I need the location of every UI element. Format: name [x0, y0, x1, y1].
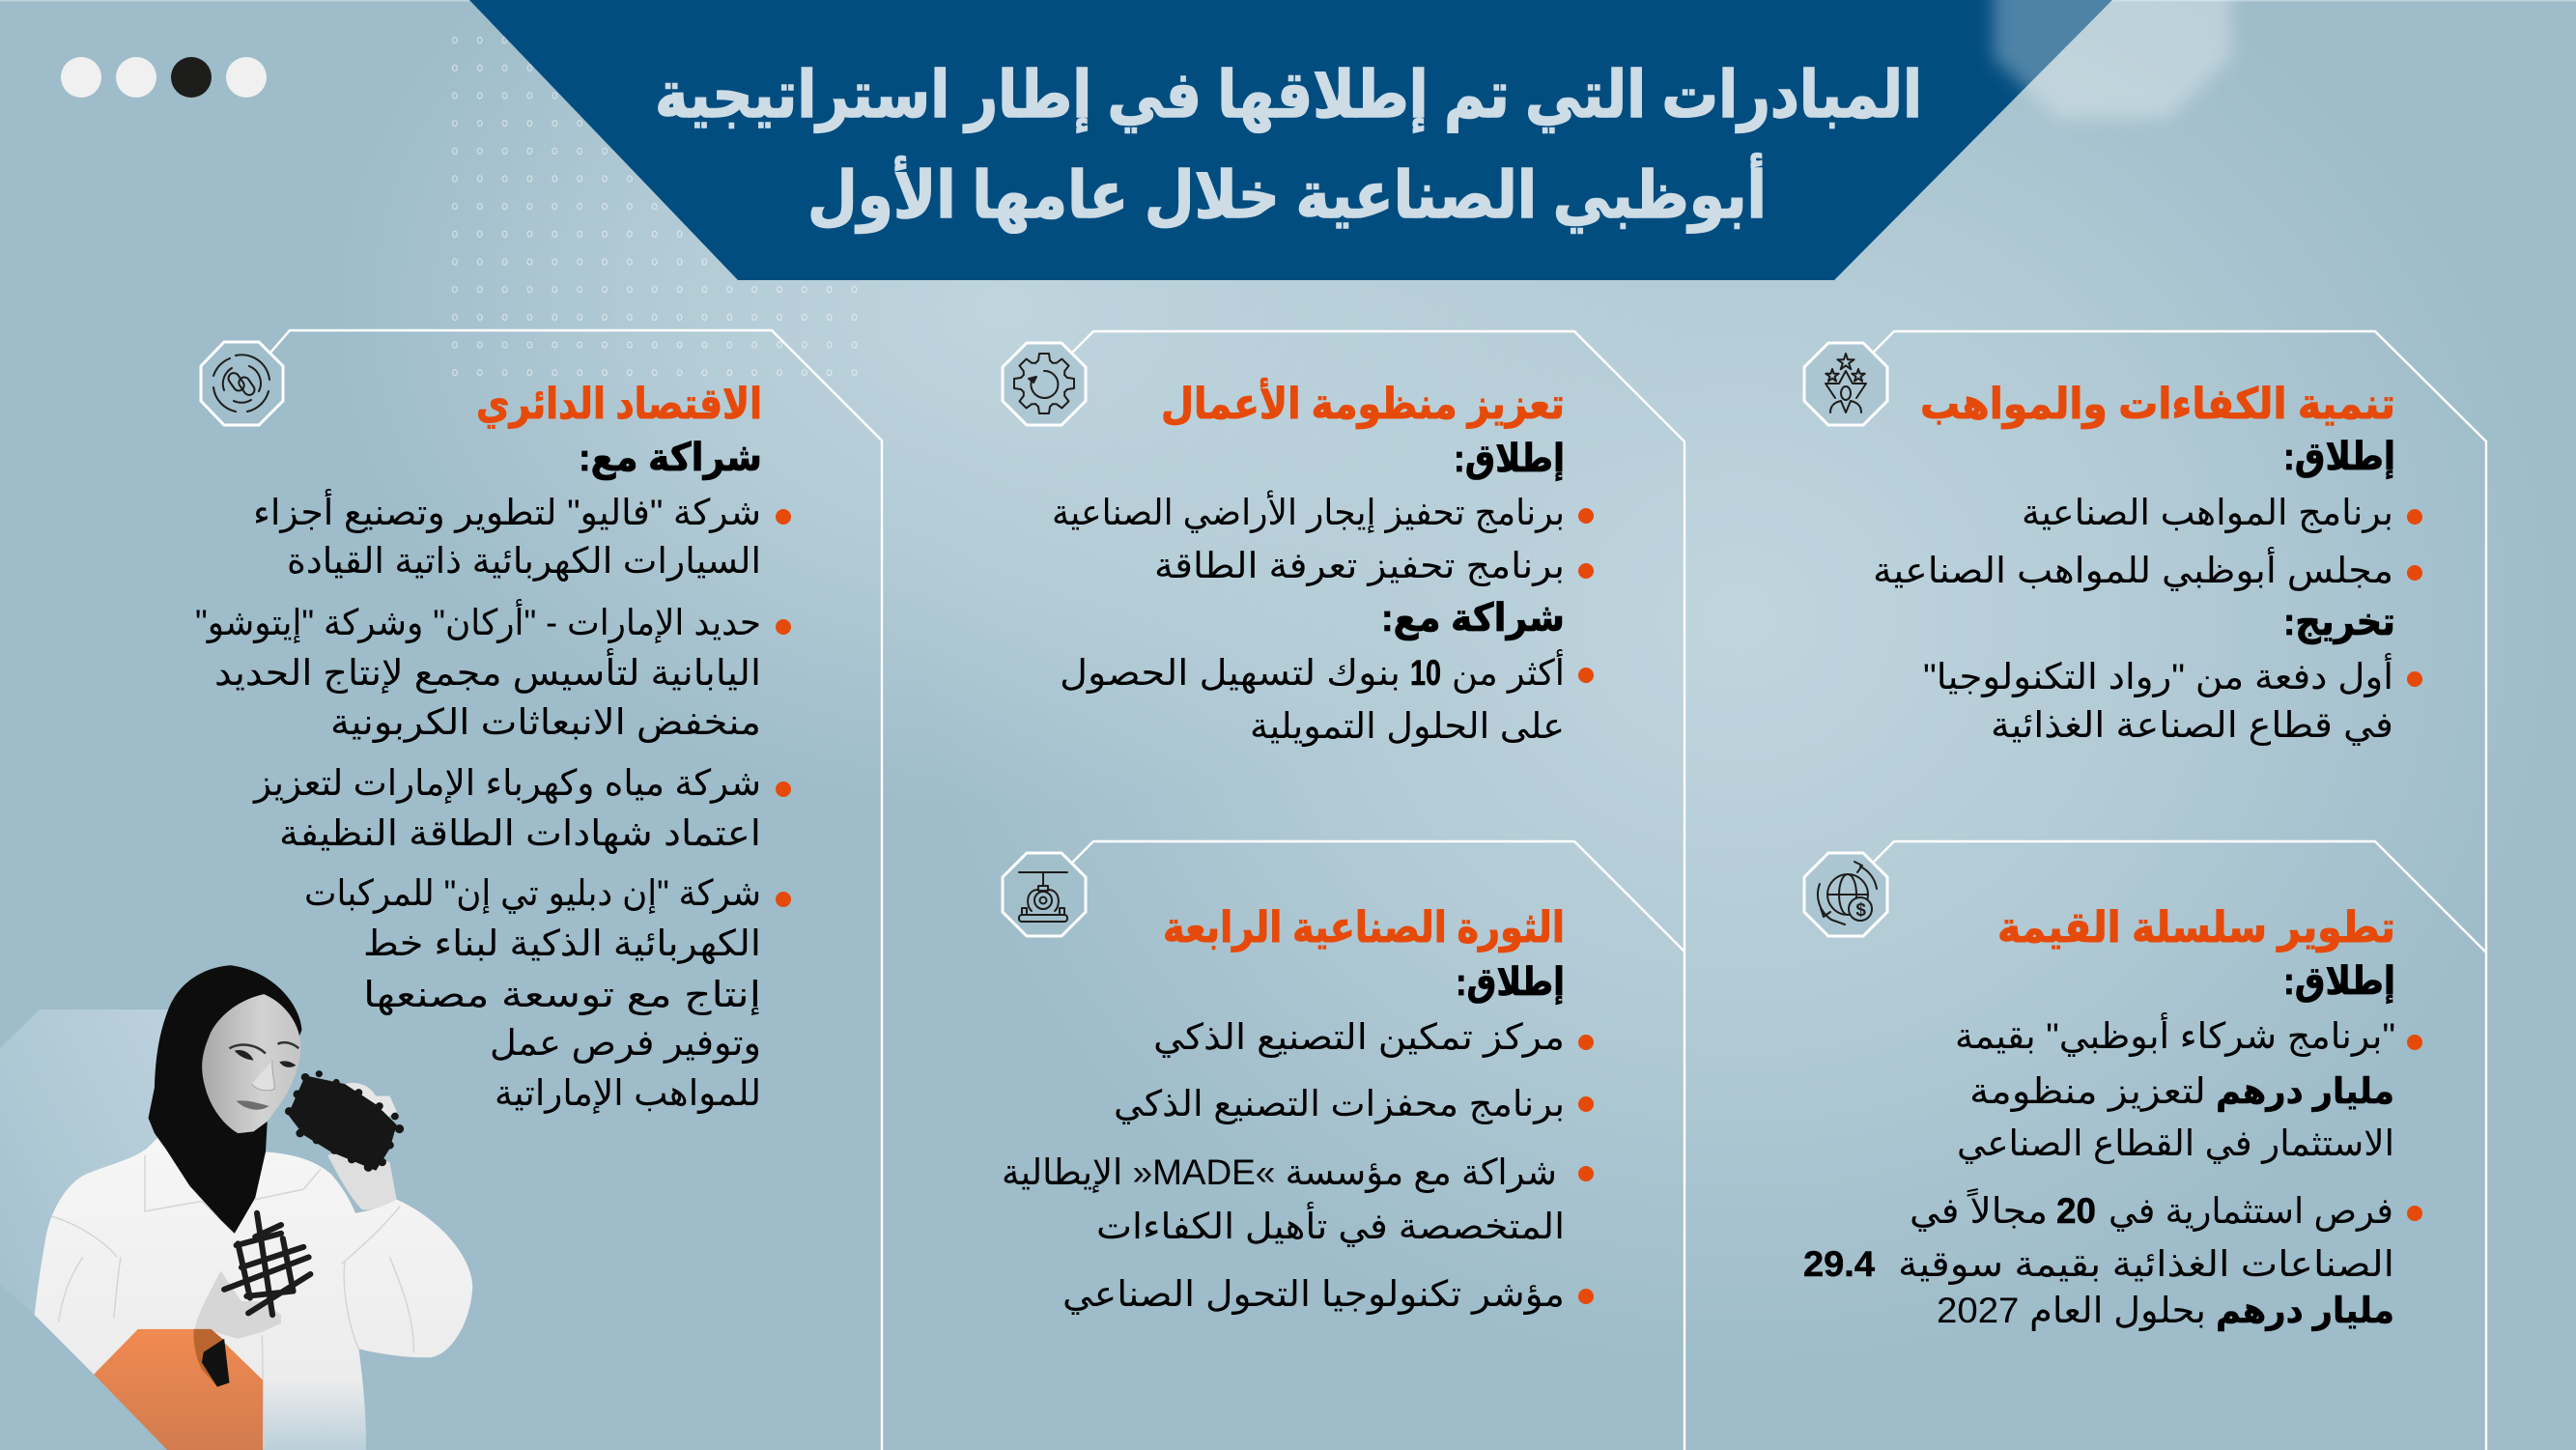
bullet item: مليار درهم: [2216, 1071, 2394, 1112]
icon: circular economy chain: [201, 342, 283, 425]
bullet item: في قطاع الصناعة الغذائية: [1991, 705, 2393, 746]
bullet item: الصناعات الغذائية بقيمة سوقية: [1898, 1244, 2394, 1285]
title: المبادرات التي تم إطلاقها في إطار استراتيجية: [655, 59, 1922, 133]
bullet item: مؤشر تكنولوجيا التحول الصناعي: [1062, 1274, 1565, 1315]
panel outline: [1873, 841, 2486, 952]
panel outline: [1873, 331, 2486, 1450]
bullet item: اليابانية لتأسيس مجمع لإنتاج الحديد: [214, 648, 761, 694]
subheading: launch: إطلاق:: [2283, 436, 2395, 479]
decorative window dots: [61, 57, 267, 98]
title: أبوظبي الصناعية خلال عامها الأول: [807, 153, 1767, 234]
subheading: launch: إطلاق:: [2283, 960, 2395, 1004]
bullet item: لتعزيز منظومة: [1969, 1071, 2206, 1112]
bullet item: المتخصصة في تأهيل الكفاءات: [1096, 1202, 1565, 1247]
bullet item: [1803, 1188, 2422, 1331]
panel outline: [1072, 331, 1684, 1450]
bullet item: برنامج المواهب الصناعية: [2022, 493, 2393, 533]
bullet item: 20: [2056, 1191, 2096, 1231]
bullet item: الاستثمار في القطاع الصناعي: [1957, 1123, 2394, 1164]
bullet item: شراكة مع مؤسسة »MADE« الإيطالية: [1002, 1152, 1557, 1193]
bullet item: الكهربائية الذكية لبناء خط: [363, 924, 761, 964]
panel: الاقتصاد الدائري: [195, 330, 882, 1450]
subheading: launch: إطلاق:: [1456, 961, 1565, 1005]
icon: stars and person: [1804, 343, 1887, 425]
panel outline: [270, 330, 882, 1450]
bullet item: برنامج تحفيز تعرفة الطاقة: [1154, 546, 1565, 586]
bullet item: حديد الإمارات - "أركان" وشركة "إيتوشو": [195, 599, 761, 643]
subheading: launch: إطلاق:: [1454, 438, 1565, 481]
bullet item: [1060, 649, 1594, 747]
bullet item: [1923, 653, 2422, 746]
panel: تعزيز منظومة الأعمال: [1003, 331, 1684, 1450]
panel: الثورة الصناعية الرابعة: [1002, 841, 1684, 1315]
bullet item: [304, 873, 791, 1114]
panel: تنمية الكفاءات والمواهب: [1804, 331, 2486, 1450]
bullet item: [253, 489, 791, 582]
heading: الاقتصاد الدائري: [476, 381, 762, 429]
bullet item: شركة "فاليو" لتطوير وتصنيع أجزاء: [253, 489, 761, 533]
icon: globe with dollar: $: [1855, 900, 1866, 921]
bullet item: مجلس أبوظبي للمواهب الصناعية: [1873, 547, 2393, 591]
bullet item: وتوفير فرص عمل: [490, 1023, 761, 1064]
bullet item: إنتاج مع توسعة مصنعها: [363, 975, 761, 1015]
subheading: partnership: شراكة مع:: [579, 437, 762, 480]
heading: تطوير سلسلة القيمة: [1997, 904, 2395, 952]
bullet item: على الحلول التمويلية: [1250, 706, 1565, 747]
bullet item: برنامج تحفيز إيجار الأراضي الصناعية: [1052, 490, 1565, 533]
decorative shape behind photo: [0, 1009, 179, 1375]
bullet item: [252, 763, 791, 854]
heading: تعزيز منظومة الأعمال: [1161, 378, 1565, 429]
bullet item: [195, 599, 791, 743]
icon: globe with dollar: [1804, 853, 1887, 936]
bullet item: مركز تمكين التصنيع الذكي: [1153, 1017, 1565, 1058]
bullet item: 10: [1410, 653, 1441, 693]
bullet item: بحلول العام 2027: [1937, 1291, 2206, 1331]
title: [655, 59, 1922, 234]
bullet item: مجالاً في: [1910, 1188, 2048, 1232]
bullet item: شركة مياه وكهرباء الإمارات لتعزيز: [252, 763, 761, 804]
subheading: partnership: شراكة مع:: [1381, 597, 1565, 640]
bullet item: [1955, 1012, 2422, 1164]
heading: تنمية الكفاءات والمواهب: [1920, 381, 2395, 429]
icon: gear with rotation arrow: [1003, 343, 1086, 425]
header banner: [469, 0, 2231, 280]
bullet item: [1002, 1152, 1594, 1247]
heading: الثورة الصناعية الرابعة: [1163, 904, 1565, 952]
bullet item: أكثر من: [1452, 649, 1565, 694]
orange accent shape: [94, 1329, 263, 1450]
bullet item: فرص استثمارية في: [2109, 1191, 2393, 1232]
bullet item: "برنامج شركاء أبوظبي" بقيمة: [1955, 1012, 2395, 1057]
panel outline: [1072, 841, 1684, 952]
bullet item: اعتماد شهادات الطاقة النظيفة: [279, 813, 761, 854]
bullet item: شركة "إن دبليو تي إن" للمركبات: [304, 873, 761, 914]
bullet item: مليار درهم: [2216, 1291, 2394, 1331]
photo: woman in lab coat holding lattice samples: [35, 965, 472, 1450]
panel: تطوير سلسلة القيمة: [1803, 841, 2486, 1331]
bullet item: برنامج محفزات التصنيع الذكي: [1114, 1084, 1565, 1124]
bullet item: السيارات الكهربائية ذاتية القيادة: [287, 541, 761, 582]
icon: robotic claw with gear: [1003, 853, 1086, 936]
bullet item: بنوك لتسهيل الحصول: [1060, 653, 1401, 694]
bullet item: أول دفعة من "رواد التكنولوجيا": [1923, 653, 2393, 697]
bullet item: للمواهب الإماراتية: [495, 1073, 761, 1114]
bullet item: 29.4: [1803, 1244, 1875, 1284]
subheading: graduation: تخريج:: [2283, 601, 2395, 644]
bullet item: منخفض الانبعاثات الكربونية: [330, 702, 761, 743]
